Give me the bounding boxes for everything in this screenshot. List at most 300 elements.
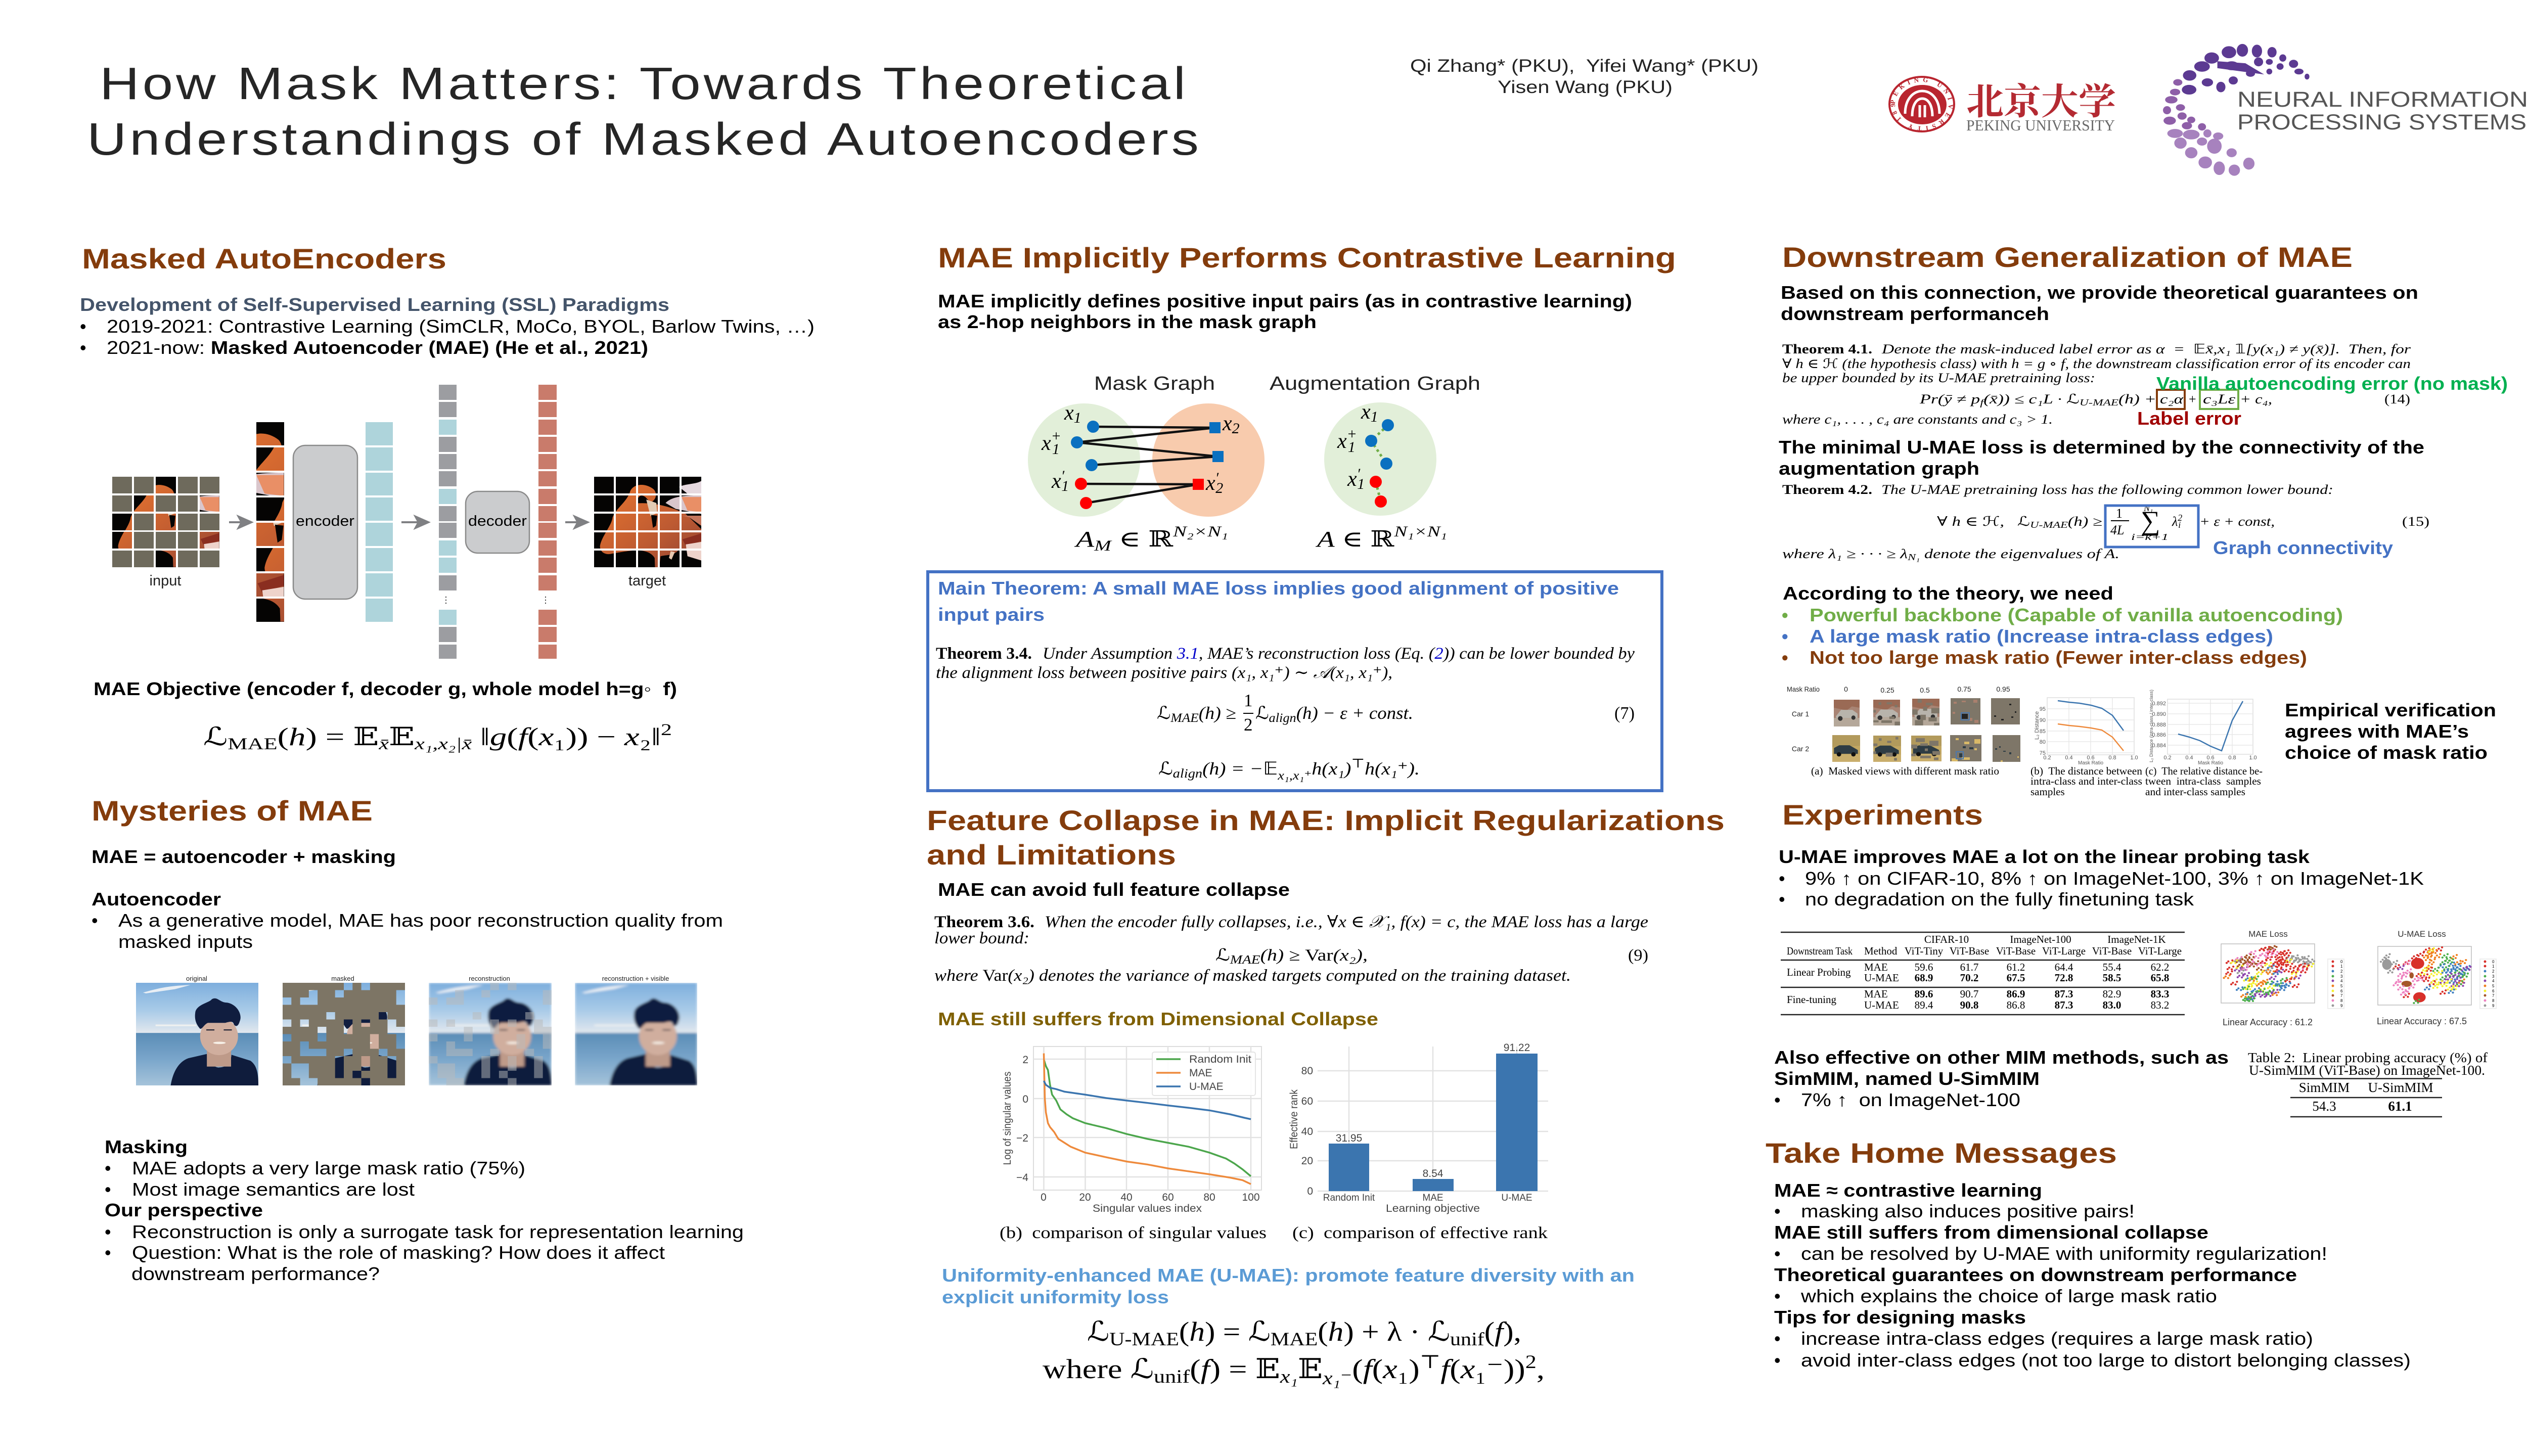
- text block: empirical verification: choice of mask ratio: [2285, 742, 2488, 763]
- text block: requirements: According to the theory, we need: [1783, 583, 2113, 604]
- text block: theorem 4.2: ∑: [2141, 506, 2160, 536]
- diagram: augmentation graph: 1: [1348, 439, 1356, 456]
- table: accuracy results: 64.4: [2055, 961, 2073, 973]
- text block: empirical verification: agrees with MAE’s: [2285, 721, 2469, 742]
- bar chart: effective rank: 0: [1307, 1186, 1313, 1197]
- figure: masked car views: Mask Ratio: [1787, 685, 1820, 693]
- table: accuracy results: ViT-Base: [1950, 945, 1989, 957]
- table: SimMIM: SimMIM: [2299, 1080, 2350, 1095]
- text block: theorem 3.6: [934, 879, 1648, 985]
- text block: messages: Theoretical guarantees on downstream performance: [1774, 1264, 2297, 1285]
- table: accuracy results: 70.2: [1960, 972, 1978, 984]
- table: accuracy results: Method: [1864, 945, 1898, 957]
- callout: main theorem: ⊤: [1351, 757, 1365, 770]
- text block: theorem 4.1: + c₄,: [2240, 392, 2272, 406]
- table: accuracy results: 86.8: [2007, 999, 2025, 1011]
- callout: main theorem: (7): [1614, 703, 1635, 723]
- formula: U-MAE loss: unif: [1154, 1367, 1190, 1387]
- text block: masking and perspective: •: [105, 1221, 111, 1242]
- logo: NeurIPS: NEURAL INFORMATION: [2237, 87, 2528, 112]
- text block: messages: •: [1774, 1328, 1781, 1349]
- formula: U-MAE loss: MAE: [1271, 1329, 1318, 1350]
- text block: requirements: •: [1782, 647, 1788, 668]
- legend: MAE scatter: 3: [2340, 974, 2343, 979]
- subheading: dimensional collapse: MAE still suffers from Dimensional Collapse: [938, 1009, 1378, 1029]
- legend: U-MAE scatter: 3: [2492, 974, 2495, 979]
- text block: messages: MAE still suffers from dimensional collapse: [1774, 1222, 2208, 1243]
- legend: U-MAE scatter: 1: [2492, 964, 2495, 969]
- table: accuracy results: ViT-Tiny: [1905, 945, 1944, 957]
- panel: Feature Collapse: [927, 804, 1725, 1389]
- formula: U-MAE loss: f) = 𝔼: [1201, 1354, 1269, 1384]
- text block: masking and perspective: MAE adopts a very large mask ratio (75%): [132, 1158, 525, 1178]
- line chart: relative distance: L₂ Distance (intra-class / inter-class): [2149, 690, 2154, 762]
- text block: masking and perspective: Question: What is the role of masking? How does it affect: [132, 1242, 665, 1263]
- legend: MAE scatter: 9: [2340, 1004, 2343, 1008]
- bar chart: effective rank: Learning objective: [1386, 1203, 1480, 1214]
- logo: NeurIPS: PROCESSING SYSTEMS: [2237, 110, 2526, 134]
- line chart: distance vs mask ratio: Mask Ratio: [2078, 760, 2103, 766]
- text block: autoencoder: [92, 846, 723, 952]
- label: label error: Label error: [2137, 408, 2241, 429]
- diagram: mask graph: x: [1042, 432, 1051, 455]
- line chart: singular values: 40: [1120, 1192, 1133, 1203]
- text block: messages: Tips for designing masks: [1774, 1307, 2026, 1328]
- formula: MAE loss: x̄: [378, 735, 389, 753]
- arrow: [565, 517, 588, 528]
- heading: Feature Collapse in MAE: Implicit Regularizations: [927, 804, 1725, 836]
- formula: U-MAE loss: f: [1440, 1354, 1454, 1384]
- line chart: singular values: 80: [1203, 1192, 1215, 1203]
- line chart: singular values: 0: [1041, 1192, 1047, 1203]
- formula: U-MAE loss: (: [1318, 1316, 1328, 1347]
- text block: masking and perspective: [105, 1136, 744, 1284]
- text block: masking and perspective: Masking: [105, 1136, 188, 1157]
- callout: main theorem: 2: [1244, 715, 1253, 735]
- figure: masked car views: [1787, 685, 2020, 762]
- text block: requirements: Not too large mask ratio (Fewer inter-class edges): [1810, 647, 2307, 668]
- visible patch strip: [132, 420, 409, 624]
- callout: main theorem: ℒ: [1255, 703, 1268, 723]
- formula: U-MAE loss: 𝔼: [1298, 1354, 1323, 1384]
- text block: guarantees: Based on this connection, we provide theoretical guarantees on: [1781, 282, 2418, 303]
- line chart: relative distance: 1.0: [2249, 755, 2257, 761]
- text block: autoencoder: MAE = autoencoder + masking: [92, 846, 396, 867]
- bar chart: effective rank: 8.54: [1423, 1168, 1443, 1179]
- text block: theorem 4.1: f: [1980, 397, 1985, 407]
- diagram: mask graph: ′: [1215, 470, 1219, 486]
- table: SimMIM: U-SimMIM: [2368, 1080, 2433, 1095]
- bar chart: effective rank: MAE: [1422, 1193, 1443, 1203]
- callout: main theorem: h(x₁⁺).: [1365, 759, 1420, 779]
- heading: Masked AutoEncoders: [82, 243, 446, 275]
- heading: [927, 804, 1725, 871]
- formula: MAE loss: MAE: [228, 735, 278, 753]
- figure: masked car views: 0.75: [1957, 685, 1971, 693]
- legend: U-MAE scatter: 9: [2492, 1004, 2495, 1008]
- target grid: [593, 476, 703, 589]
- text block: SSL paradigms: •: [80, 337, 86, 358]
- text block: theorem 4.2: + ε + const,: [2199, 514, 2275, 529]
- heading: MAE Implicitly Performs Contrastive Learning: [938, 242, 1676, 274]
- table: accuracy results: U-MAE: [1864, 999, 1899, 1011]
- line chart: relative distance: Mask Ratio: [2198, 760, 2223, 766]
- line chart: distance vs mask ratio: 95: [2040, 706, 2046, 712]
- legend: U-MAE scatter: 7: [2492, 993, 2495, 998]
- figure: masked car views: 0: [1844, 685, 1848, 693]
- formula: U-MAE loss: [1043, 1316, 1545, 1389]
- callout: vanilla autoencoding box: [2200, 390, 2238, 409]
- text block: messages: avoid inter-class edges (not too large to distort belonging classes): [1801, 1350, 2411, 1371]
- text block: theorem 4.2: N₁: [1907, 552, 1920, 562]
- callout: main theorem: align: [1173, 767, 1202, 781]
- line chart: relative distance: 0.888: [2152, 722, 2166, 728]
- table: accuracy results: 87.3: [2055, 999, 2073, 1011]
- diagram: augmentation graph: Augmentation Graph: [1270, 373, 1480, 394]
- callout: main theorem: the alignment loss between positive pairs (x₁, x₁⁺) ∼ 𝒜(x₁, x₁⁺),: [936, 664, 1392, 682]
- callout: main theorem: Main Theorem: A small MAE loss implies good alignment of positive: [938, 578, 1619, 599]
- diagram: augmentation graph: x: [1347, 468, 1357, 491]
- text block: other MIM methods: 7% ↑ on ImageNet-100: [1801, 1089, 2020, 1110]
- line chart: singular values: 2: [1022, 1054, 1028, 1066]
- callout: main theorem: ℒ: [1158, 759, 1171, 779]
- text block: theorem 4.2: denote the eigenvalues of A.: [1920, 547, 2119, 561]
- table: accuracy results: [1781, 932, 2185, 1015]
- legend: MAE scatter: 2: [2340, 969, 2343, 974]
- heading: Experiments: [1782, 799, 1983, 831]
- callout: main theorem: MAE: [1170, 711, 1199, 725]
- table: accuracy results: 90.8: [1960, 999, 1978, 1011]
- bar chart: effective rank: 91.22: [1504, 1042, 1530, 1054]
- table: accuracy results: Linear Probing: [1787, 966, 1851, 978]
- formula: U-MAE loss: f(x₁): [1363, 1354, 1416, 1384]
- formula: U-MAE loss: unif: [1450, 1329, 1485, 1350]
- title: [87, 59, 1202, 165]
- figure captions: and inter-class samples: [2145, 786, 2245, 798]
- formula: U-MAE loss: ℒ: [1087, 1316, 1107, 1347]
- figure: reconstruction examples: reconstruction + visible: [602, 975, 669, 982]
- table: accuracy results: 65.8: [2151, 972, 2169, 984]
- table: accuracy results: Downstream Task: [1787, 945, 1853, 957]
- text block: guarantees: [1781, 282, 2418, 324]
- text block: other MIM methods: •: [1774, 1089, 1781, 1110]
- text block: theorem 4.1: [1782, 342, 2411, 427]
- line chart: singular values: −2: [1016, 1132, 1028, 1144]
- diagram: mask graph: M: [1094, 537, 1112, 554]
- scatter plot: U-MAE loss: [2377, 929, 2471, 1026]
- text block: messages: masking also induces positive pairs!: [1801, 1201, 2135, 1221]
- text block: theorem 4.2: where λ₁ ≥ · · · ≥ λ: [1782, 547, 1877, 561]
- formula: U-MAE loss: U-MAE: [1109, 1329, 1179, 1350]
- diagram: mask graph: ′: [1061, 468, 1065, 484]
- text block: theorem 4.1: +: [2189, 392, 2196, 406]
- bar chart: effective rank: 31.95: [1336, 1132, 1362, 1144]
- text block: U-MAE minimum: [1779, 437, 2424, 479]
- callout: graph connectivity box: [2105, 506, 2198, 547]
- table: accuracy results: 83.0: [2103, 999, 2121, 1011]
- table: accuracy results: ViT-Base: [1996, 945, 2036, 957]
- figure captions: tween intra-class samples: [2145, 775, 2261, 787]
- title: How Mask Matters: Towards Theoretical: [100, 59, 1189, 109]
- scatter plot: U-MAE loss: U-MAE Loss: [2398, 929, 2446, 939]
- text block: messages: •: [1774, 1286, 1781, 1306]
- scatter plot: MAE loss: Linear Accuracy : 61.2: [2223, 1017, 2313, 1027]
- formula: U-MAE loss: where ℒ: [1043, 1354, 1136, 1384]
- callout: main theorem: (h) ≥: [1199, 703, 1236, 723]
- figure captions: (a) Masked views with different mask ratio: [1811, 765, 1999, 777]
- table: accuracy results: 87.3: [2055, 988, 2073, 1000]
- figure: reconstruction examples: reconstruction: [469, 975, 510, 982]
- table: accuracy results: 58.5: [2103, 972, 2121, 984]
- diagram: mask graph: x: [1206, 472, 1215, 495]
- figure: masked car views: 0.5: [1920, 686, 1930, 694]
- formula: MAE loss: 𝔼: [389, 722, 415, 751]
- callout: main theorem: (h) − ε + const.: [1296, 703, 1413, 723]
- line chart: relative distance: 0.890: [2152, 711, 2166, 717]
- table: SimMIM: 54.3: [2312, 1099, 2336, 1114]
- diagram: mask graph: Mask Graph: [1094, 373, 1215, 394]
- text block: autoencoder: masked inputs: [118, 931, 253, 952]
- text block: U-MAE improvements: •: [1779, 889, 1785, 909]
- table: SimMIM: Table 2: Linear probing accuracy (%) of: [2248, 1050, 2488, 1065]
- line chart: singular values: 60: [1162, 1192, 1174, 1203]
- formula: MAE loss: g(f(x₁)) − x₂‖: [490, 722, 655, 751]
- formula: MAE loss: x₁,x₂|x̄: [414, 735, 472, 753]
- formula: U-MAE loss: ⊤: [1420, 1352, 1440, 1373]
- text block: U-MAE minimum: The minimal U-MAE loss is determined by the connectivity of the: [1779, 437, 2424, 458]
- arrow: [401, 517, 428, 528]
- figure: masked car views: 0.95: [1996, 685, 2010, 693]
- line chart: distance vs mask ratio: 0.4: [2065, 755, 2073, 761]
- figure: reconstruction examples: masked: [331, 975, 354, 982]
- panel: Masked AutoEncoders: [80, 243, 815, 753]
- table: accuracy results: 89.6: [1915, 988, 1933, 1000]
- callout: main theorem: h(x₁): [1312, 759, 1351, 779]
- text block: messages: increase intra-class edges (requires a large mask ratio): [1801, 1328, 2313, 1349]
- bar chart: effective rank: U-MAE: [1501, 1193, 1532, 1203]
- heading: and Limitations: [927, 839, 1176, 871]
- panel: Mysteries of MAE: [92, 795, 744, 1284]
- text block: U-MAE improvements: •: [1779, 868, 1785, 889]
- bar chart: effective rank: 80: [1301, 1065, 1313, 1077]
- encoder block: encoder: [296, 513, 354, 529]
- panel: Take Home Messages: [1766, 1137, 2411, 1371]
- text block: theorem 4.2: 4L: [2110, 523, 2124, 537]
- text block: SSL paradigms: [80, 294, 815, 358]
- input grid: [110, 475, 222, 589]
- text block: theorem 4.1: Theorem 4.1.: [1782, 342, 1872, 356]
- text block: U-MAE minimum: augmentation graph: [1779, 458, 1979, 479]
- line chart: singular values: U-MAE: [1189, 1081, 1224, 1093]
- text block: theorem 4.1: be upper bounded by its U-MAE pretraining loss:: [1782, 371, 2095, 385]
- diagram: augmentation graph: A ∈ ℝ: [1317, 527, 1381, 552]
- label: graph connectivity: Graph connectivity: [2213, 537, 2393, 558]
- diagram: mask graph: +: [1051, 428, 1061, 444]
- table: accuracy results: CIFAR-10: [1924, 933, 1969, 945]
- text block: theorem 4.1: U-MAE: [2080, 397, 2118, 407]
- text block: theorem 4.1: c₂α: [2160, 392, 2184, 406]
- table: accuracy results: 83.3: [2151, 988, 2169, 1000]
- line chart: singular values: 20: [1079, 1192, 1091, 1203]
- line chart: singular values: MAE: [1189, 1067, 1212, 1079]
- diagram: mask graph: x: [1052, 470, 1061, 493]
- chart captions: (c) comparison of effective rank: [1292, 1224, 1548, 1242]
- legend: MAE scatter: 5: [2340, 984, 2343, 988]
- diagram: MAE architecture: [110, 385, 703, 659]
- text block: U-MAE improvements: no degradation on the fully finetuning task: [1805, 889, 2194, 909]
- text block: theorem 3.6: lower bound:: [934, 929, 1029, 947]
- table: accuracy results: 82.9: [2103, 988, 2121, 1000]
- panel: Experiments: [1774, 799, 2496, 1117]
- text block: masking and perspective: •: [105, 1242, 111, 1263]
- legend: MAE scatter: [2328, 959, 2344, 1009]
- figure captions: (c) The relative distance be-: [2145, 765, 2263, 777]
- text block: theorem 4.1: where c₁, . . . , c₄ are constants and c₃ > 1.: [1782, 412, 2053, 427]
- table: accuracy results: ImageNet-1K: [2107, 933, 2166, 945]
- line chart: distance vs mask ratio: 0.6: [2087, 755, 2095, 761]
- encoder block: [293, 445, 357, 599]
- logo: Peking University: [1888, 76, 2116, 134]
- callout: main theorem: input pairs: [938, 604, 1045, 625]
- legend: U-MAE scatter: 6: [2492, 989, 2495, 993]
- formula: U-MAE loss: h) + λ · ℒ: [1328, 1316, 1437, 1347]
- line chart: singular values: 100: [1242, 1192, 1260, 1203]
- diagram: mask graph: 2: [1232, 420, 1240, 437]
- text block: empirical verification: Empirical verification: [2285, 700, 2496, 720]
- full token column: [439, 385, 457, 659]
- panel: Downstream Generalization: [1779, 241, 2508, 798]
- line chart: distance vs mask ratio: 0.8: [2108, 755, 2116, 761]
- formula: MAE loss: 2: [661, 721, 672, 739]
- text block: other MIM methods: SimMIM, named U-SimMIM: [1774, 1068, 2040, 1089]
- arrow: [229, 517, 251, 528]
- text block: theorem 4.1: Pr(ȳ ≠ p: [1920, 392, 1963, 406]
- callout: label error box: [2157, 390, 2185, 409]
- callout: main theorem: [928, 572, 1662, 791]
- diagram: mask graph: 2: [1215, 480, 1223, 496]
- text block: U-MAE improvements: [1779, 846, 2424, 909]
- text block: theorem 4.2: i: [2178, 520, 2181, 530]
- formula: MAE loss: ‖: [472, 722, 490, 751]
- table: accuracy results: 68.9: [1915, 972, 1933, 984]
- text block: theorem 4.2: (h) ≥: [2068, 514, 2102, 529]
- table: accuracy results: 61.7: [1960, 961, 1978, 973]
- line chart: distance vs mask ratio: 90: [2040, 717, 2046, 723]
- label: vanilla autoencoding error: Vanilla autoencoding error (no mask): [2156, 373, 2508, 394]
- legend: MAE scatter: 8: [2340, 998, 2343, 1003]
- input grid: input: [150, 573, 181, 589]
- text block: U-MAE: Uniformity-enhanced MAE (U-MAE): promote feature diversity with an: [942, 1265, 1635, 1286]
- callout: main theorem: 1: [1244, 691, 1253, 710]
- legend: MAE scatter: 1: [2340, 964, 2343, 969]
- line chart: distance vs mask ratio: 1.0: [2130, 755, 2138, 761]
- table: accuracy results: MAE: [1864, 961, 1888, 973]
- text block: theorem 4.1: ∀ h ∈ ℋ (the hypothesis class) with h = g ∘ f, the downstream classification error of its encoder can: [1782, 356, 2411, 371]
- figure: reconstruction examples: [136, 975, 697, 1085]
- figure: masked car views: 0.25: [1880, 686, 1894, 694]
- text block: messages: •: [1774, 1243, 1781, 1264]
- table: accuracy results: Fine-tuning: [1787, 993, 1836, 1006]
- text block: theorem 4.2: Theorem 4.2.: [1782, 482, 1872, 497]
- bar chart: effective rank: Effective rank: [1288, 1089, 1300, 1149]
- text block: theorem 4.2: [1782, 482, 2429, 562]
- text block: guarantees: downstream performanceh: [1781, 303, 2049, 324]
- formula: MAE loss: (: [278, 722, 289, 751]
- formula: U-MAE loss: ,: [1537, 1354, 1545, 1384]
- text block: theorem 3.6: (h) ≥: [1260, 946, 1305, 965]
- diagram: augmentation graph: 1: [1357, 476, 1365, 492]
- line chart: relative distance: 0.886: [2152, 732, 2166, 738]
- text block: U-MAE improvements: U-MAE improves MAE a lot on the linear probing task: [1779, 846, 2310, 867]
- text block: autoencoder: •: [92, 910, 98, 931]
- text block: masking and perspective: Reconstruction is only a surrogate task for representation learning: [132, 1221, 744, 1242]
- legend: U-MAE scatter: 2: [2492, 969, 2495, 974]
- decoder block: decoder: [468, 513, 527, 529]
- figure captions: [1811, 765, 2263, 798]
- figure: masked car views: Car 2: [1792, 745, 1809, 753]
- text block: theorem 3.6: where Var(x₂) denotes the variance of masked targets computed on the training dataset.: [934, 967, 1571, 985]
- text block: positive pairs: as 2-hop neighbors in the mask graph: [938, 311, 1317, 332]
- figure captions: intra-class and inter-class: [2030, 775, 2142, 787]
- text block: theorem 4.2: U-MAE: [2030, 520, 2068, 530]
- table: SimMIM: [2248, 1050, 2488, 1117]
- diagram: mask graph: 1: [1074, 410, 1081, 426]
- table: accuracy results: 72.8: [2055, 972, 2073, 984]
- text block: theorem 3.6: Theorem 3.6.: [934, 913, 1034, 931]
- diagram: augmentation graph: N₁×N₁: [1393, 523, 1447, 540]
- authors: [1410, 56, 1758, 97]
- bar chart: effective rank: 40: [1301, 1126, 1313, 1138]
- chart captions: [1000, 1224, 1548, 1242]
- line chart: relative distance: 0.8: [2228, 755, 2236, 761]
- line chart: singular values: Log of singular values: [1002, 1072, 1013, 1165]
- bar chart: effective rank: Random Init: [1323, 1193, 1375, 1203]
- line chart: relative distance: 0.884: [2152, 743, 2166, 749]
- table: accuracy results: 67.5: [2007, 972, 2025, 984]
- title: Understandings of Masked Autoencoders: [87, 114, 1202, 165]
- authors: Yisen Wang (PKU): [1498, 77, 1673, 97]
- line chart: distance vs mask ratio: [2034, 698, 2138, 766]
- legend: U-MAE scatter: 5: [2492, 984, 2495, 988]
- chart captions: (b) comparison of singular values: [1000, 1224, 1267, 1242]
- text block: theorem 4.2: 2: [2178, 513, 2182, 523]
- diagram: augmentation graph: x: [1337, 430, 1347, 453]
- formula: U-MAE loss: (: [1352, 1354, 1363, 1384]
- diagram: augmentation graph: ′: [1357, 466, 1361, 482]
- bar chart: effective rank: 60: [1301, 1096, 1313, 1107]
- table: accuracy results: MAE: [1864, 988, 1888, 1000]
- logo: Peking University: 北京大学: [1966, 82, 2116, 122]
- legend: U-MAE scatter: 8: [2492, 998, 2495, 1003]
- table: accuracy results: ViT-Large: [2042, 945, 2086, 957]
- text block: autoencoder: Autoencoder: [92, 889, 221, 909]
- legend: MAE scatter: 0: [2340, 960, 2343, 964]
- table: accuracy results: 62.2: [2151, 961, 2169, 973]
- text block: theorem 4.2: The U-MAE pretraining loss has the following common lower bound:: [1881, 482, 2333, 497]
- text block: theorem 4.1: (14): [2384, 392, 2410, 406]
- figure: reconstruction examples: original: [186, 975, 207, 982]
- text block: messages: can be resolved by U-MAE with uniformity regularization!: [1801, 1243, 2327, 1264]
- text block: theorem 3.6: (9): [1628, 946, 1648, 965]
- diagram: mask graph: ∈ ℝ: [1111, 527, 1173, 552]
- text block: messages: •: [1774, 1201, 1781, 1221]
- formula: MAE loss: ℒ: [203, 722, 221, 751]
- text block: requirements: •: [1782, 605, 1788, 625]
- text block: theorem 3.6: Var (x₂),: [1305, 946, 1362, 965]
- heading: Mysteries of MAE: [92, 795, 373, 827]
- text block: SSL paradigms: 2021-now: Masked Autoencoder (MAE) (He et al., 2021): [107, 337, 648, 358]
- callout: main theorem: Theorem 3.4.: [936, 645, 1032, 663]
